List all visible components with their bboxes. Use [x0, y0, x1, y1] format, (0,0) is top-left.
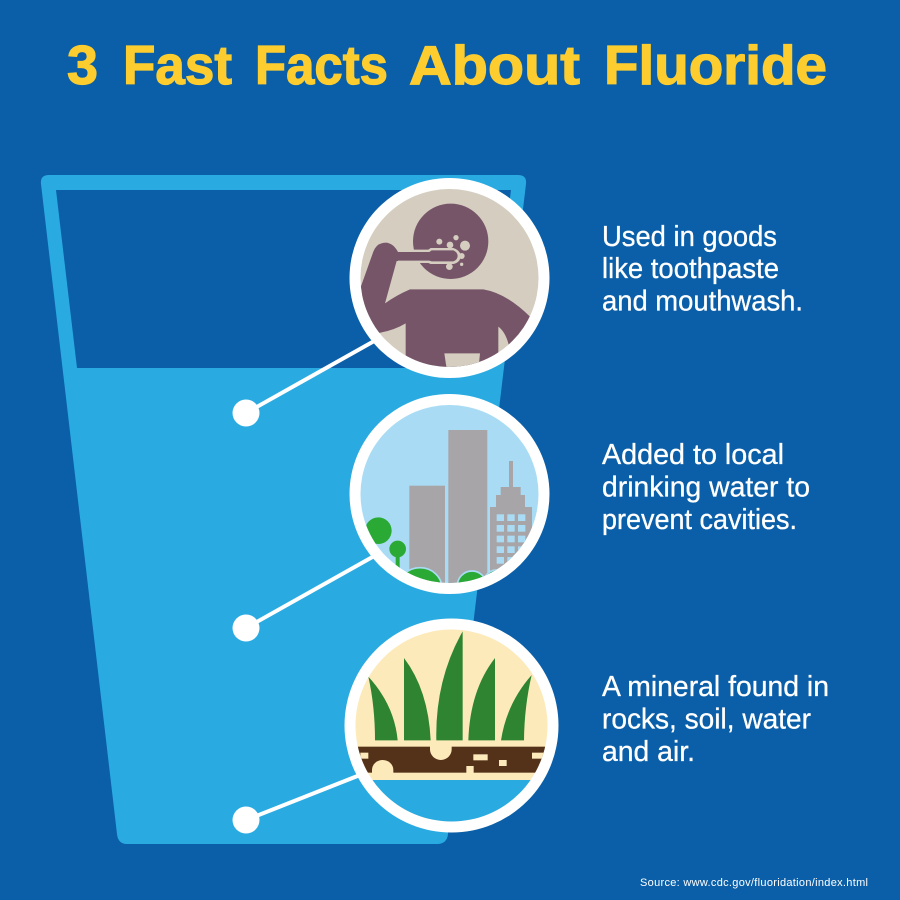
fact text 3: A mineral found in	[602, 671, 829, 703]
connector line 1 with dot	[232, 340, 376, 426]
title: 3	[67, 34, 98, 96]
title: About	[409, 34, 580, 96]
fact text 1: and mouthwash.	[602, 286, 803, 318]
fact text 3: rocks, soil, water	[602, 704, 811, 736]
connector line 3 with dot	[232, 775, 360, 834]
fact text 2: drinking water to	[602, 472, 810, 504]
water glass	[41, 175, 526, 844]
fact text 3: and air.	[602, 736, 695, 768]
fact text 1: Used in goods	[602, 221, 777, 253]
source note: Source: www.cdc.gov/fluoridation/index.html	[640, 877, 868, 889]
fact text 2: Added to local	[602, 439, 784, 471]
title: Fluoride	[604, 34, 827, 96]
icon: city skyline with trees	[350, 394, 550, 609]
icon: person brushing teeth	[350, 178, 550, 378]
fact text 2: prevent cavities.	[602, 504, 797, 536]
title: Fast	[123, 34, 232, 96]
title	[67, 34, 827, 96]
icon: grass, soil and water	[344, 618, 558, 832]
connector line 2 with dot	[232, 555, 376, 642]
fact text 1: like toothpaste	[602, 253, 779, 285]
title: Facts	[255, 34, 388, 96]
